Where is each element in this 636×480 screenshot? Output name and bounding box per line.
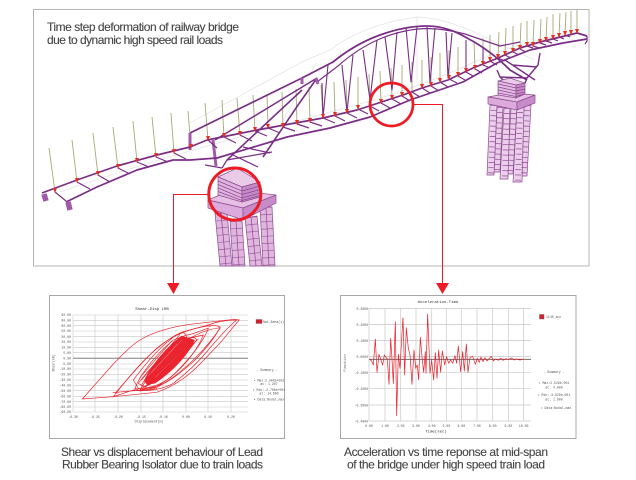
y axis labels: 0.1000 — [357, 339, 368, 343]
y axis labels: 5.00 — [63, 351, 71, 355]
y axis labels: -30.00 — [60, 378, 71, 382]
panel: bridge deformation model — [34, 10, 589, 266]
callout circle: mid-span — [370, 83, 413, 126]
left pier with lead rubber bearing — [208, 168, 276, 266]
summary: • Data:Nodal,max — [254, 398, 284, 402]
legend — [256, 320, 284, 324]
x axis labels: -0.15 — [136, 415, 146, 419]
y axis labels: 10.00 — [61, 346, 71, 350]
zero line — [369, 358, 531, 360]
x axis labels: 9.00 — [504, 424, 512, 428]
red load arrows — [53, 29, 579, 193]
grid — [73, 315, 248, 412]
right pier — [487, 78, 535, 182]
legend: 1140_acc — [546, 315, 561, 319]
caption: acceleration vs time: of the bridge under high speed train load — [347, 458, 545, 472]
heading: bridge deformation: due to dynamic high speed rail loads — [47, 33, 223, 47]
y axis labels: -0.3000 — [355, 404, 368, 408]
axis titles — [52, 354, 163, 424]
right pier columns — [487, 105, 531, 182]
y axis labels — [60, 313, 71, 414]
legend: Nat-Beha(i) — [263, 320, 284, 324]
y axis labels: 80.00 — [61, 318, 71, 322]
chart title: Acceleration-Time — [418, 300, 459, 305]
y axis labels: 60.00 — [61, 324, 71, 328]
callout circle: bearing — [209, 168, 261, 220]
deck chords — [42, 33, 587, 202]
x axis labels — [68, 415, 235, 419]
y axis labels — [355, 307, 368, 424]
axis titles: Time(sec) — [425, 430, 447, 434]
y axis labels: 30.00 — [61, 335, 71, 339]
left pier columns — [215, 207, 275, 266]
x axis labels: 6.00 — [457, 424, 465, 428]
y axis labels: -40.00 — [60, 384, 71, 388]
panel: acceleration vs time chart — [340, 296, 576, 438]
y axis labels: -20.00 — [60, 372, 71, 376]
x axis labels: 1.00 — [381, 424, 389, 428]
x axis labels: 0.10 — [204, 415, 212, 419]
x axis labels: 0.00 — [182, 415, 190, 419]
y axis labels: 0.0000 — [357, 355, 368, 359]
x axis labels: 10.00 — [519, 424, 529, 428]
x axis labels: -0.20 — [113, 415, 123, 419]
x axis labels: 0.20 — [227, 415, 235, 419]
summary: at: 4.000 — [545, 386, 563, 390]
load poles — [49, 10, 577, 192]
end legs — [44, 194, 70, 210]
y axis labels: 50.00 — [61, 329, 71, 333]
heading: bridge deformation: Time step deformation of railway bridge — [47, 20, 239, 34]
axis titles: Shear(kN) — [52, 354, 56, 372]
caption: acceleration vs time — [344, 445, 548, 472]
x axis labels: 8.00 — [489, 424, 497, 428]
arch chords — [302, 26, 527, 82]
y axis labels: -80.00 — [60, 405, 71, 409]
y axis labels: -60.00 — [60, 394, 71, 398]
summary: • Min:-2.706e+001 — [253, 388, 285, 392]
x axis labels: -0.10 — [158, 415, 168, 419]
arrow: bearing to hysteresis chart — [167, 194, 208, 294]
summary: • Data:Nodal,max — [541, 406, 571, 410]
right pile cap — [488, 93, 535, 110]
caption: shear vs displacement: Rubber Bearing Isolator due to train loads — [62, 458, 263, 472]
x axis labels: -0.25 — [90, 415, 100, 419]
right bearing block — [498, 78, 525, 98]
x axis labels: 5.00 — [442, 424, 450, 428]
pile cap — [208, 190, 276, 220]
zero line — [73, 357, 248, 359]
axis titles: Displacement(m) — [135, 420, 163, 424]
deck cross beams — [55, 35, 570, 201]
arrow: mid-span to acceleration chart — [414, 104, 449, 294]
summary: at: 14.600 — [259, 392, 279, 396]
summary: • Max:2.500e+001 — [254, 378, 284, 382]
axis titles — [343, 354, 447, 434]
chart title: Shear-Disp LRB — [135, 307, 169, 312]
y axis labels: 0.2000 — [357, 323, 368, 327]
summary: • Max:2.529e-001 — [539, 381, 569, 385]
summary: - Summary - — [543, 370, 565, 374]
heading: bridge deformation — [47, 20, 239, 47]
bridge arch, hangers and frame — [42, 26, 587, 210]
caption: shear vs displacement: Shear vs displacement behaviour of Lead — [61, 445, 263, 459]
axis titles: Function — [343, 354, 348, 372]
caption: acceleration vs time: Acceleration vs time reponse at mid-span — [344, 445, 548, 459]
x axis labels: 2.00 — [397, 424, 405, 428]
inclined side chords and struts — [190, 78, 318, 168]
y axis labels: 0.00 — [63, 356, 71, 360]
y axis labels: -0.1000 — [355, 371, 368, 375]
V hangers — [322, 27, 483, 118]
hysteresis dense core — [139, 334, 198, 387]
y axis labels: -0.4000 — [355, 420, 368, 424]
x axis labels — [365, 424, 529, 428]
x axis labels: 0.00 — [365, 424, 373, 428]
y axis labels: -50.00 — [60, 389, 71, 393]
summary — [253, 368, 285, 402]
caption: shear vs displacement — [61, 445, 263, 472]
y axis labels: -5.00 — [61, 362, 71, 366]
x axis labels: -0.30 — [68, 415, 78, 419]
summary: - Summary - — [256, 368, 278, 372]
panel: shear vs displacement chart — [50, 296, 285, 438]
grid — [369, 308, 531, 421]
summary — [538, 370, 571, 410]
summary: at: 1.900 — [545, 398, 563, 402]
y axis labels: -90.00 — [60, 410, 71, 414]
legend — [540, 314, 561, 319]
x axis labels: 4.00 — [428, 424, 436, 428]
summary: • Min:-3.029e-001 — [538, 393, 570, 397]
right pier frame — [497, 53, 540, 83]
y axis labels: 90.00 — [61, 313, 71, 317]
y axis labels: -0.2000 — [355, 387, 368, 391]
y axis labels: -70.00 — [60, 400, 71, 404]
y axis labels: 20.00 — [61, 340, 71, 344]
undeformed ghost outline — [60, 17, 575, 192]
hysteresis loops — [82, 319, 239, 399]
summary: at: 1.207 — [260, 382, 278, 386]
y axis labels: -10.00 — [60, 367, 71, 371]
y axis labels: 0.3000 — [357, 307, 368, 311]
x axis labels: 3.00 — [412, 424, 420, 428]
bearing block — [218, 168, 260, 202]
x axis labels: 7.00 — [473, 424, 481, 428]
acceleration time series — [369, 314, 523, 416]
